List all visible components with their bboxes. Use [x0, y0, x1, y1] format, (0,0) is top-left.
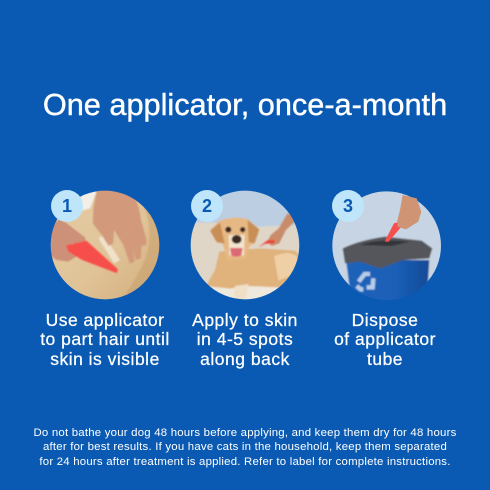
disclaimer: Do not bathe your dog 48 hours before applying, and keep them dry for 48 hours [33, 427, 457, 439]
tongue [230, 248, 243, 257]
step 2 text: in 4-5 spots [197, 329, 293, 349]
disclaimer [33, 427, 457, 468]
hand: left [50, 219, 87, 262]
applicator [385, 220, 405, 242]
head [211, 216, 256, 258]
photo: applicator tossed into recycling bin [332, 191, 441, 300]
photo: applicator parting fur [50, 190, 160, 300]
recycle mark [357, 274, 373, 289]
badge 3 [332, 190, 364, 222]
step illustrations [50, 190, 441, 300]
badge 1: 1 [62, 196, 72, 216]
applicator [258, 240, 275, 247]
step 1 text: to part hair until [40, 329, 170, 349]
step 3 text: of applicator [334, 329, 436, 349]
step 3 text: Dispose [352, 310, 418, 330]
badge 2 [191, 190, 223, 222]
step 2 text: along back [200, 349, 290, 369]
badge 1 [51, 190, 83, 222]
step 2 text [192, 310, 298, 369]
dog body [206, 248, 303, 289]
step 1 text: skin is visible [50, 349, 160, 369]
step 1 text [40, 310, 170, 369]
hand [397, 195, 421, 229]
badge 2: 2 [202, 196, 212, 216]
step 1 text: Use applicator [46, 310, 164, 330]
applicator [66, 241, 118, 273]
step 3 text: tube [367, 349, 403, 369]
disclaimer: for 24 hours after treatment is applied. Refer to label for complete instructions. [39, 456, 451, 468]
bin [346, 260, 429, 303]
step 2 text: Apply to skin [192, 310, 298, 330]
badge 3: 3 [343, 196, 353, 216]
sofa [190, 222, 299, 284]
arm [267, 213, 295, 246]
title: One applicator, once-a-month [43, 87, 447, 122]
hand: top right [93, 190, 147, 264]
disclaimer: after for best results. If you have cats in the household, keep them separated [43, 441, 447, 453]
step 3 text [334, 310, 436, 369]
photo: dog on sofa [190, 190, 300, 300]
bag [343, 237, 432, 268]
